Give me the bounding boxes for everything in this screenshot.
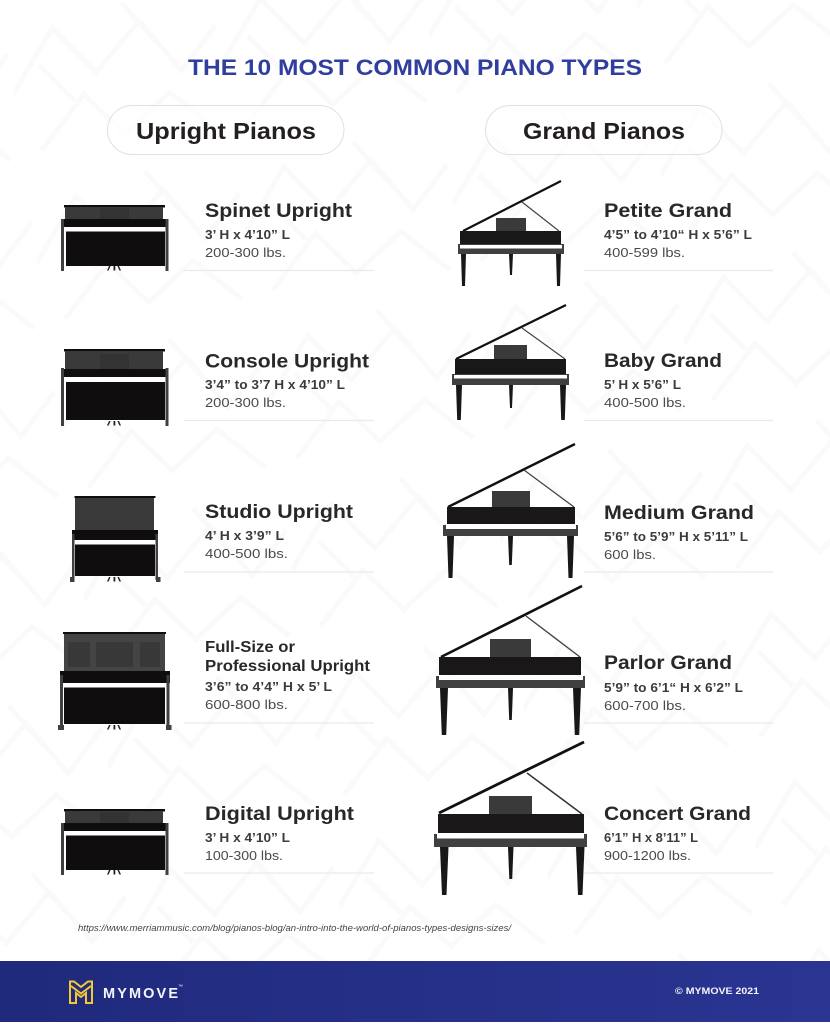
icon: mymove logo (70, 982, 92, 1003)
text: digital upright: 3’ H x 4’10” L (205, 831, 290, 845)
text: baby grand (584, 350, 773, 420)
text: full-size or professional upright: Full-Size or (205, 639, 295, 656)
text: studio upright: Studio Upright (205, 501, 354, 523)
text: concert grand: Concert Grand (604, 803, 751, 825)
text: full-size or professional upright: 600-800 lbs. (205, 698, 288, 712)
text: spinet upright: 200-300 lbs. (205, 246, 286, 260)
text: parlor grand: 5’9” to 6’1“ H x 6’2” L (604, 681, 743, 695)
heading: grand pianos (486, 106, 722, 154)
text: parlor grand (584, 652, 773, 723)
text: petite grand (584, 200, 773, 270)
text: full-size or professional upright (184, 639, 374, 723)
text: parlor grand: 600-700 lbs. (604, 699, 686, 713)
text: console upright: 3’4” to 3’7 H x 4’10” L (205, 378, 345, 392)
text: digital upright: 100-300 lbs. (205, 849, 283, 863)
icon: spinet upright piano (61, 205, 168, 271)
heading: grand pianos: Grand Pianos (523, 118, 685, 144)
text: spinet upright: Spinet Upright (205, 200, 353, 222)
text: console upright (184, 350, 374, 420)
icon: full-size upright piano (58, 632, 172, 730)
text: studio upright: 400-500 lbs. (205, 547, 288, 561)
title: THE 10 MOST COMMON PIANO TYPES (188, 55, 642, 80)
text: medium grand: Medium Grand (604, 502, 754, 524)
brand name: MYMOVE (103, 986, 178, 1002)
text: studio upright: 4’ H x 3’9” L (205, 529, 284, 543)
text: medium grand (584, 502, 773, 572)
text: spinet upright (184, 200, 374, 270)
icon: baby grand piano (452, 305, 569, 420)
text: spinet upright: 3’ H x 4’10” L (205, 228, 290, 242)
text: petite grand: Petite Grand (604, 200, 732, 222)
text: full-size or professional upright: Professional Upright (205, 658, 370, 675)
text: petite grand: 4’5” to 4’10“ H x 5’6” L (604, 228, 752, 242)
text: baby grand: 400-500 lbs. (604, 396, 686, 410)
text: medium grand: 600 lbs. (604, 548, 656, 562)
text: parlor grand: Parlor Grand (604, 652, 732, 674)
text: baby grand: Baby Grand (604, 350, 722, 372)
icon: petite grand piano (458, 181, 564, 286)
heading: upright pianos: Upright Pianos (136, 118, 316, 144)
icon: studio upright piano (70, 496, 160, 582)
trademark: ™ (178, 984, 183, 990)
text: full-size or professional upright: 3’6” to 4’4” H x 5’ L (205, 680, 332, 694)
copyright: © MYMOVE 2021 (675, 986, 760, 997)
text: digital upright: Digital Upright (205, 803, 355, 825)
text: console upright: Console Upright (205, 350, 370, 372)
text: concert grand (584, 803, 773, 873)
icon: console upright piano (61, 349, 168, 426)
source url: https://www.merriammusic.com/blog/pianos-blog/an-intro-into-the-world-of-pianos-types-designs-sizes/ (78, 923, 513, 933)
heading: upright pianos (108, 106, 344, 154)
text: console upright: 200-300 lbs. (205, 396, 286, 410)
text: concert grand: 6’1” H x 8’11” L (604, 831, 698, 845)
text: baby grand: 5’ H x 5’6” L (604, 378, 681, 392)
text: medium grand: 5’6” to 5’9” H x 5’11” L (604, 530, 748, 544)
text: digital upright (184, 803, 374, 873)
footer bar (0, 961, 830, 1022)
icon: concert grand piano (434, 742, 587, 895)
text: concert grand: 900-1200 lbs. (604, 849, 691, 863)
text: petite grand: 400-599 lbs. (604, 246, 685, 260)
icon: parlor grand piano (436, 586, 585, 735)
text: studio upright (184, 501, 374, 572)
icon: digital upright piano (61, 809, 168, 875)
icon: medium grand piano (443, 444, 578, 578)
